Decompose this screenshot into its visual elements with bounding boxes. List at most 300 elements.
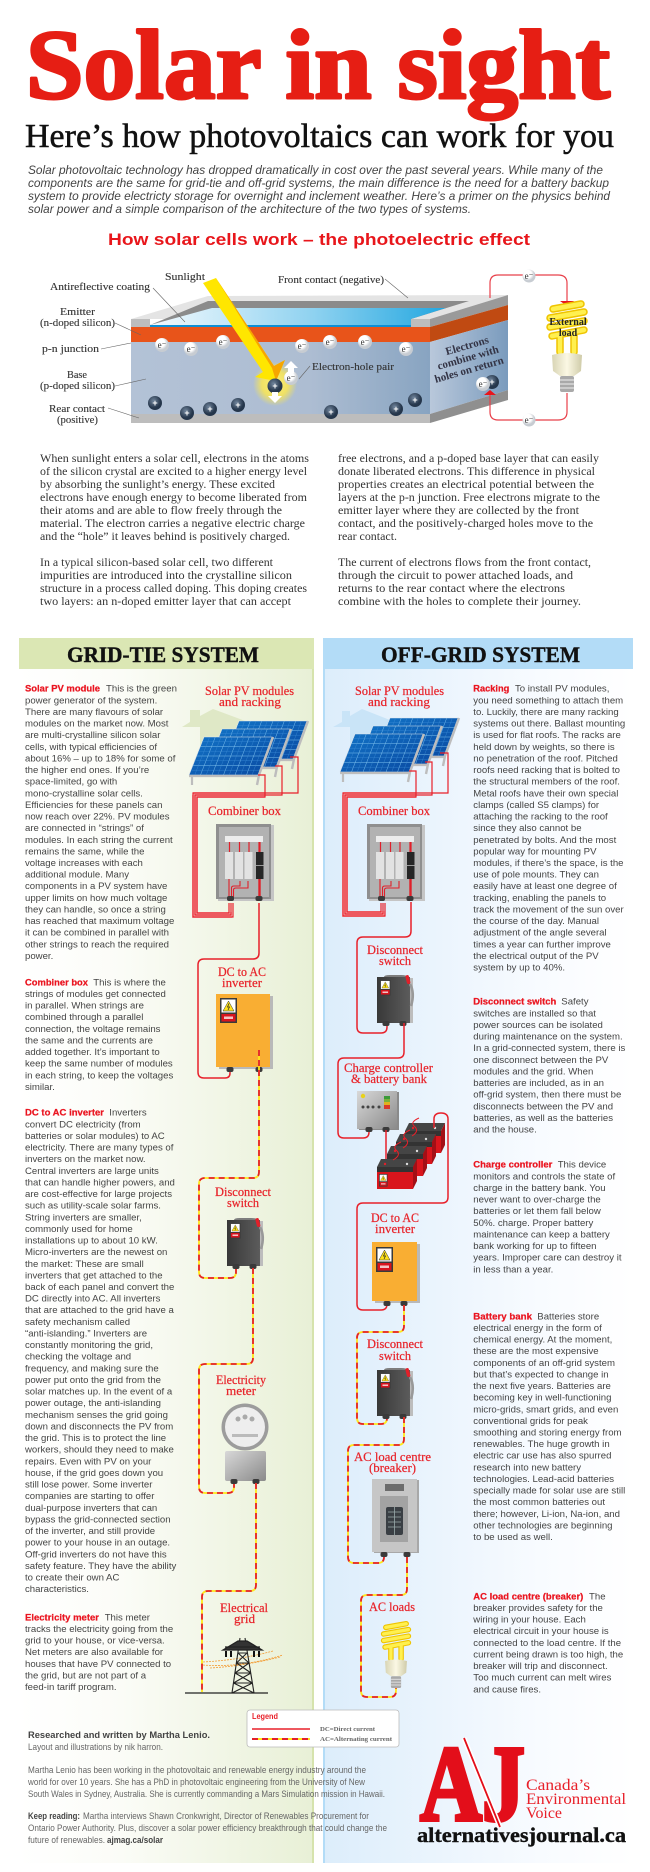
text: solar pv module: cells, with typical efficiencies of: [25, 742, 157, 753]
label: inverter: inverter: [222, 975, 263, 990]
text: battery bank: conventional grids for peak: [473, 1416, 588, 1427]
text: ac load centre: connected to the load centre. If the: [473, 1638, 621, 1649]
label: inverter: DC to AC: [371, 1210, 419, 1225]
text: ac load centre: wiring in your house. Each: [472, 1615, 586, 1626]
legend: AC=Alternating current: [320, 1736, 393, 1743]
text: solar pv module: components in a PV system have: [25, 881, 167, 892]
text: electricity meter: Net meters are also available for: [25, 1647, 164, 1658]
text: charge controller: bank working for up to fifteen: [473, 1241, 597, 1252]
icon: combiner box: [367, 824, 425, 901]
text: dc to ac inverter: back of each panel and convert the: [25, 1282, 174, 1293]
icon: charge controller: [357, 1091, 399, 1132]
text: solar pv module: other strings to reach the required: [25, 939, 169, 950]
text block: explanation left: electrons have enough energy to become liberated from: [40, 490, 307, 504]
wire: ac: [361, 1557, 407, 1697]
text: disconnect switch: In a grid-connected system, there is: [473, 1043, 625, 1054]
text: racking: the course of the day. Manual: [473, 916, 599, 927]
text block: explanation right: The current of electrons flows from the front contact,: [338, 555, 591, 569]
text: ac load centre: breaker provides safety for the: [473, 1603, 603, 1614]
text block: explanation left: material. The electron carries a negative electric charge: [40, 516, 305, 530]
label: disconnect switch: Disconnect: [367, 942, 423, 957]
text block: explanation left: structure in a process called doping. This doping creates: [40, 581, 307, 595]
label: solar pv modules and racking: [355, 683, 444, 709]
text: dc to ac inverter: down and disconnects the PV from: [25, 1421, 173, 1432]
text: dc to ac inverter: safety feature. They have the ability: [25, 1561, 176, 1572]
text: combiner box: This is where the: [93, 977, 166, 988]
diagram labels: p-n junction: [42, 344, 99, 355]
electron combining with hole: [476, 375, 499, 391]
text: battery bank: smoothing and storing energy from: [473, 1428, 622, 1438]
text: electricity meter: feed-in tariff program.: [25, 1682, 117, 1693]
text: combiner box: Combiner box: [25, 977, 89, 988]
credits: future of renewables.: [28, 1835, 105, 1846]
icon: disconnect switch: [227, 1218, 263, 1269]
text: solar pv module: remains the same, while the: [25, 846, 144, 857]
text: racking: clamps (called S5 clamps) for: [473, 800, 600, 811]
label: disconnect switch: switch: [379, 1348, 411, 1363]
text: dc to ac inverter: commonly used for home: [25, 1224, 133, 1235]
icon: solar array: [340, 718, 459, 782]
label: electrical grid: Electrical: [220, 1600, 268, 1615]
text: battery bank: chemical energy. At the moment,: [473, 1335, 612, 1346]
electrons: e⁻: [287, 373, 296, 383]
text: combiner box: connection, the voltage remains: [25, 1024, 161, 1035]
text: solar pv module: now reach over 22%. PV modules: [25, 812, 170, 823]
text: dc to ac inverter: companies are starting to offer: [25, 1491, 155, 1502]
label: inverter: [218, 964, 266, 990]
credits: [27, 1730, 387, 1846]
diagram labels: Emitter: [60, 307, 96, 318]
text: racking: Racking: [473, 684, 509, 695]
text: racking: since they also cannot be: [473, 823, 582, 834]
icon: combiner box: [216, 824, 274, 901]
text: disconnect switch: switches are installed so that: [473, 1008, 596, 1019]
holes: +: [235, 400, 241, 410]
text: charge controller: in less than a year.: [473, 1264, 553, 1275]
credits: Martha Lenio has been working in the photovoltaic and renewable energy industry around the: [28, 1765, 366, 1776]
text: dc to ac inverter: electricity. There are many types of: [25, 1143, 174, 1154]
text: racking: adjustment of the angle several: [473, 928, 607, 939]
label: electricity meter: meter: [226, 1383, 257, 1398]
label: inverter: DC to AC: [218, 964, 266, 979]
text: solar pv module: upper limits on how much voltage: [25, 893, 167, 904]
credits: Keep reading:: [28, 1811, 80, 1822]
text: dc to ac inverter: of the inverter, and still provide: [25, 1526, 155, 1537]
text: battery bank: technologies. Lead-acid batteries: [473, 1474, 614, 1485]
electrons: e⁻: [219, 337, 228, 347]
label: disconnect switch: [367, 942, 423, 968]
text: battery bank: Battery bank: [473, 1311, 533, 1322]
legend: DC=Direct current: [320, 1726, 376, 1733]
text: racking: to. Luckily, there are many racking: [473, 707, 619, 718]
heading: grid-tie: GRID-TIE SYSTEM: [67, 642, 259, 667]
electrons: e⁻: [326, 337, 335, 347]
text: racking: easily have at least one degree of: [473, 881, 617, 892]
text: solar pv module: power.: [25, 951, 53, 962]
icon: solar array: [189, 721, 308, 785]
title: Solar in sight: [26, 11, 610, 120]
holes: +: [272, 381, 278, 391]
text: dc to ac inverter: power outage, the anti-islanding: [25, 1398, 161, 1409]
text: electricity meter: the grid, but are not part of a: [25, 1670, 147, 1681]
text block: explanation right: [338, 451, 600, 608]
wires: module strings: [193, 757, 298, 917]
icon: ac load centre: [372, 1479, 419, 1557]
text: dc to ac inverter: convert DC electricity (from: [25, 1119, 141, 1130]
diagram: grid-tie system chain: [182, 683, 308, 1693]
text: disconnect switch: power sources can be isolated: [473, 1020, 603, 1031]
legend: [247, 1710, 399, 1747]
icon: electrical grid tower: [185, 1638, 283, 1693]
text: racking: Metal roofs have their own special: [473, 788, 618, 799]
wire: ac: [199, 1268, 253, 1493]
label: charge controller and battery bank: Charge controller: [344, 1060, 434, 1075]
wire: ac: [348, 1417, 404, 1563]
text: dc to ac inverter: DC directly into AC. All inverters: [25, 1294, 161, 1305]
text: combiner box: keep the same number of modules: [25, 1059, 173, 1070]
intro text: system to provide electricty storage for overnight and inclement weather. Here’s a primer on the physics behind: [28, 189, 610, 203]
credits: Researched and written by Martha Lenio.: [28, 1730, 210, 1741]
side note: [433, 334, 505, 386]
text: combiner box: in parallel. When strings are: [25, 1001, 144, 1012]
glow: [253, 362, 297, 406]
text: dc to ac inverter: checking the voltage and: [25, 1352, 131, 1363]
label: inverter: [371, 1210, 419, 1236]
text: battery bank: these are the most expensive: [473, 1346, 599, 1357]
label: electricity meter: Electricity: [216, 1372, 266, 1387]
text: disconnect switch: Safety: [561, 997, 589, 1008]
text: dc to ac inverter: such as utility-scale solar farms.: [25, 1201, 161, 1212]
icon: disconnect switch: [377, 975, 413, 1026]
logo: alternatives journal: Environmental: [526, 1791, 627, 1808]
text: dc to ac inverter: the grid. This is to protect the line: [25, 1433, 166, 1444]
label: solar pv modules and racking: [205, 683, 294, 709]
diagram labels: (n-doped silicon): [40, 318, 115, 329]
text: racking: roofs need racking that is bolted to: [473, 765, 620, 776]
wire: dc: [357, 1113, 448, 1310]
text block: explanation right: layers at the p-n junction. Free electrons migrate to the: [338, 490, 600, 504]
text: charge controller: maintenance can keep a battery: [473, 1229, 610, 1240]
text: battery bank: the next five years. Batteries are: [473, 1381, 611, 1392]
text: racking: use of pole mounts. They can: [473, 870, 599, 881]
text: electricity meter: tracks the electricity going from the: [25, 1624, 173, 1635]
text: disconnect switch: batteries, as well as the batteries: [473, 1113, 613, 1124]
text: solar pv module: are multi-crystalline silicon solar: [25, 730, 161, 741]
text: dc to ac inverter: mechanism senses the grid going: [25, 1410, 168, 1421]
text: dc to ac inverter: characteristics.: [25, 1584, 89, 1595]
label: inverter: inverter: [375, 1221, 416, 1236]
text: dc to ac inverter: dual-purpose inverters that can: [25, 1503, 157, 1514]
diagram labels: Base: [67, 370, 88, 381]
text: battery bank: electrical energy in the form of: [473, 1323, 602, 1334]
text: racking: track the movement of the sun over: [473, 904, 624, 915]
diagram labels: (positive): [57, 415, 98, 426]
text: battery bank: micro-grids, smart grids, and even: [473, 1404, 618, 1415]
text: ac load centre: electrical circuit in your house is: [473, 1626, 609, 1637]
icon: bulb external load: [549, 304, 587, 392]
text: dc to ac inverter: workers, should they need to make: [24, 1445, 174, 1456]
electrons: [155, 335, 413, 385]
text: ac load centre: The: [589, 1591, 606, 1602]
text: solar pv module: are connected in “strings” of: [25, 823, 144, 834]
text: racking: To install PV modules,: [515, 684, 609, 695]
credits: Ontario Power Authority. Plus, discover a solar power efficiency breakthrough that could change the: [28, 1823, 387, 1834]
label: combiner box: Combiner box: [358, 803, 430, 818]
label: disconnect switch: [215, 1184, 271, 1210]
text: combiner box: similar.: [25, 1082, 55, 1093]
text: dc to ac inverter: frequency, and making sure the: [25, 1363, 159, 1374]
diagram labels: Front contact (negative): [278, 275, 384, 286]
text: solar pv module: has reached that maximum voltage: [25, 916, 174, 927]
holes: +: [328, 407, 334, 417]
holes: +: [152, 398, 158, 408]
text: charge controller: batteries or let them fall below: [473, 1206, 601, 1217]
text: solar pv module: space-limited, go with: [25, 777, 117, 788]
text: dc to ac inverter: house, if the grid goes down you: [25, 1468, 163, 1479]
arrow shade: [216, 278, 285, 381]
holes: +: [393, 404, 399, 414]
label: solar pv modules and racking: Solar PV modules: [205, 683, 294, 698]
text: dc to ac inverter: bypass the grid-connected section: [25, 1514, 171, 1525]
intro text: [28, 163, 610, 216]
text: dc to ac inverter: power to your house in an outage.: [25, 1538, 170, 1549]
text: solar pv module: power generator of the system.: [25, 695, 157, 706]
text: battery bank: research into new battery: [473, 1462, 581, 1473]
text: charge controller: never want to over-charge the: [473, 1195, 601, 1206]
diagram labels: Rear contact: [49, 404, 105, 415]
text: racking: held down by weights, so there is: [473, 742, 615, 753]
subtitle: Here’s how photovoltaics can work for you: [25, 118, 614, 155]
text: dc to ac inverter: Inverters: [109, 1108, 147, 1119]
text: dc to ac inverter: solar matches up. In the event of a: [25, 1387, 173, 1398]
label: ac loads: AC loads: [369, 1599, 415, 1614]
text: battery bank: renewables. The huge growth in: [473, 1439, 610, 1450]
text block: explanation right: contact, and the positively-charged holes move to the: [338, 516, 593, 530]
icon: ac load bulb: [384, 1624, 408, 1688]
logo: alternatives journal: alternativesjournal.ca: [417, 1823, 627, 1847]
text: racking: popular way for mounting PV: [473, 846, 597, 857]
electron combining with hole: e⁻: [479, 379, 488, 389]
text: solar pv module: the higher end ones. If you’re: [25, 765, 149, 776]
wires: module strings: [343, 753, 448, 916]
label: ac load centre: [354, 1449, 431, 1475]
wire: ac: [357, 1305, 404, 1424]
icon: bulb external load: External: [549, 317, 587, 328]
text block: explanation left: and the “hole” it leaves behind is positively charged.: [40, 529, 290, 543]
text: dc to ac inverter: inverters on the market now.: [25, 1154, 146, 1165]
icon: battery bank: [377, 1118, 445, 1189]
text: racking: system by up to 40%.: [473, 963, 565, 974]
text block: explanation left: their atoms and are able to flow freely through the: [40, 503, 282, 517]
text: dc to ac inverter: batteries or solar modules) to AC: [25, 1131, 165, 1142]
label: solar pv modules and racking: Solar PV modules: [355, 683, 444, 698]
text block: explanation left: [40, 451, 309, 608]
text: battery bank: other technologies are beginning: [473, 1520, 613, 1531]
text: battery bank: becoming key in well-functioning: [473, 1393, 611, 1404]
label: charge controller and battery bank: [344, 1060, 434, 1086]
text: battery bank: electric car use has also spurred: [473, 1451, 611, 1462]
text: solar pv module: additional module. Many: [25, 870, 129, 881]
intro text: Solar photovoltaic technology has dropped dramatically in cost over the past several years. While many of the: [28, 163, 603, 177]
text: battery bank: specially made for solar use are still: [473, 1486, 625, 1497]
text block: explanation left: When sunlight enters a solar cell, electrons in the atoms: [40, 451, 309, 465]
diagram labels: (p-doped silicon): [40, 381, 115, 392]
text block: explanation right: returns to the rear contact where the electrons: [338, 581, 565, 595]
text: ac load centre: Too much current can melt wires: [473, 1673, 612, 1684]
label: disconnect switch: Disconnect: [215, 1184, 271, 1199]
text: combiner box: strings of modules get connected: [25, 989, 166, 1000]
text: dc to ac inverter: power put onto the grid from the: [25, 1375, 161, 1386]
text: disconnect switch: modules and the grid. When: [473, 1066, 593, 1077]
electron combining with hole: +: [489, 377, 495, 387]
text block: explanation left: impurities are introduced into the crystalline silicon: [40, 568, 292, 582]
text: battery bank: components of an off-grid system: [473, 1358, 615, 1369]
icon: electricity meter: [222, 1404, 268, 1484]
holes: +: [412, 395, 418, 405]
text: solar pv module: about 16% – up to 18% for some of: [25, 753, 176, 764]
electrons: e⁻: [187, 344, 196, 354]
text: solar pv module: Efficiencies for these panels can: [25, 800, 162, 811]
arrows: electron-hole movement: [268, 361, 298, 403]
text: combiner box: added together. It’s important to: [25, 1047, 160, 1058]
holes: [148, 378, 422, 420]
solar cell block: [131, 295, 508, 423]
heading: off-grid: OFF-GRID SYSTEM: [381, 642, 580, 667]
text: racking: the structural members of the roof.: [473, 777, 620, 788]
text: racking: the electrical output of the PV: [473, 951, 599, 962]
holes: +: [184, 408, 190, 418]
text: solar pv module: modules on the market now. Most: [25, 719, 169, 730]
logo: alternatives journal: AJ: [420, 1725, 525, 1844]
icon: house silhouette: [182, 709, 248, 760]
text block: explanation right: properties creates an electrical potential between the: [338, 477, 594, 491]
text: disconnect switch: Disconnect switch: [473, 997, 556, 1008]
text: battery bank: to be used as well.: [473, 1532, 553, 1543]
text: electricity meter: Electricity meter: [25, 1612, 99, 1623]
text: dc to ac inverter: DC to AC inverter: [25, 1108, 104, 1119]
leader lines: [101, 279, 408, 418]
icon: inverter: [216, 994, 273, 1072]
wire: dc: [338, 1023, 404, 1138]
wire: ac: [202, 1483, 256, 1692]
credits: Martha interviews Shawn Cronkwright, Director of Renewables Procurement for: [83, 1811, 369, 1822]
text block: explanation right: rear contact.: [338, 529, 397, 543]
text: solar pv module: voltage increases with each: [25, 858, 143, 869]
text: combiner box: the same and the currents are: [25, 1035, 153, 1046]
logo: alternatives journal: Voice: [526, 1805, 562, 1822]
text: charge controller: charge in the battery bank. You: [473, 1183, 606, 1194]
label: ac load centre: (breaker): [369, 1460, 416, 1475]
circuit wire: e⁻: [525, 271, 534, 281]
text: dc to ac inverter: repairs. Even with PV on your: [25, 1456, 152, 1467]
label: electrical grid: grid: [234, 1611, 255, 1626]
text: dc to ac inverter: String inverters are smaller,: [25, 1212, 142, 1223]
text: racking: is used for flat roofs. The racks are: [473, 730, 621, 741]
text: solar pv module: Solar PV module: [25, 684, 100, 695]
text: solar pv module: they can handle, so once a string: [25, 904, 166, 915]
wire: dc: [198, 903, 259, 1078]
arrow: sunlight: [203, 278, 285, 381]
label: charge controller and battery bank: & battery bank: [351, 1071, 427, 1086]
text: battery bank: there; however, Li-ion, Na-ion, and: [473, 1509, 620, 1520]
text: racking: systems out there. Ballast mounting: [473, 719, 625, 730]
text: battery bank: the most common batteries out: [473, 1497, 605, 1508]
credits: world for over 10 years. She has a PhD in photovoltaic engineering from the University of New: [27, 1777, 365, 1788]
text: charge controller: monitors and controls the state of: [473, 1171, 615, 1182]
side note: Electrons: [444, 334, 491, 358]
panel: off-grid system: [323, 638, 633, 1863]
text: solar pv module: mono-crystalline solar cells.: [25, 788, 143, 799]
wire: dc: [385, 1130, 387, 1170]
text: dc to ac inverter: that can handle higher powers, and: [25, 1177, 175, 1188]
label: disconnect switch: [367, 1336, 423, 1363]
icon: house silhouette: [333, 709, 395, 760]
text: racking: penetrated by bolts. And the most: [473, 835, 617, 846]
text: battery bank: Batteries store: [537, 1311, 599, 1322]
icon: inverter: [372, 1242, 420, 1306]
text: racking: tracking, enabling the panels to: [473, 893, 606, 904]
text: combiner box: in each string, to keep the voltages: [25, 1070, 173, 1081]
label: ac load centre: AC load centre: [354, 1449, 431, 1464]
label: solar pv modules and racking: and racking: [368, 694, 430, 709]
text: dc to ac inverter: installations up to about 10 kW.: [25, 1236, 158, 1247]
label: electricity meter: [216, 1372, 266, 1398]
text: dc to ac inverter: Off-grid inverters do not have this: [25, 1549, 167, 1560]
text: disconnect switch: off-grid system, then there must be: [473, 1090, 621, 1101]
text: racking: modules, if there’s the space, is the: [473, 858, 624, 869]
text: dc to ac inverter: still lose power. Some inverter: [25, 1480, 153, 1491]
heading: photoelectric effect: How solar cells work – the photoelectric effect: [108, 230, 530, 249]
text: disconnect switch: batteries are included, as in an: [473, 1078, 604, 1089]
label: solar pv modules and racking: and racking: [219, 694, 281, 709]
text: electricity meter: houses that have PV connected to: [25, 1659, 171, 1670]
text block: explanation right: combine with the holes to complete their journey.: [338, 594, 581, 608]
label: combiner box: Combiner box: [208, 803, 281, 818]
text: solar pv module: it can be combined in parallel with: [25, 928, 169, 939]
intro text: solar power and a simple comparison of the architecture of the two types of systems.: [28, 202, 471, 216]
text: racking: times a year can further improve: [473, 939, 611, 950]
intro text: components are the same for grid-tie and off-grid systems, the main difference is the need for a battery backup: [28, 176, 609, 190]
diagram labels: [40, 272, 395, 426]
text block: explanation right: through the circuit to power attached loads, and: [338, 568, 573, 582]
text: solar pv module: This is the green: [106, 684, 177, 695]
label: disconnect switch: switch: [379, 953, 411, 968]
wire: ac: [199, 1050, 259, 1278]
text: dc to ac inverter: that are attached to the grid have a: [25, 1305, 174, 1316]
side note: combine with: [436, 344, 500, 373]
text: dc to ac inverter: to create their own AC: [25, 1572, 119, 1583]
text: racking: no penetration of the roof. Pitched: [473, 753, 618, 764]
legend: Legend: [252, 1712, 278, 1721]
text: disconnect switch: and the house.: [473, 1125, 537, 1136]
diagram labels: Antireflective coating: [50, 282, 150, 293]
text: electricity meter: This meter: [105, 1612, 151, 1623]
text: dc to ac inverter: inverters that get attached to the: [25, 1270, 163, 1281]
text: charge controller: years. Improper care can destroy it: [473, 1253, 622, 1264]
text: ac load centre: breaker will trip and disconnect.: [473, 1661, 608, 1672]
label: disconnect switch: switch: [227, 1195, 259, 1210]
electrons: e⁻: [402, 344, 411, 354]
text: dc to ac inverter: the market: These are small: [25, 1259, 144, 1270]
text: battery bank: but that’s expected to change in: [473, 1369, 609, 1380]
chart: solar cell diagram: [40, 270, 587, 426]
text: disconnect switch: during maintenance on the system.: [473, 1032, 623, 1043]
text: racking: attaching the racking to the roof: [473, 812, 608, 823]
electrons: e⁻: [158, 340, 167, 350]
text block: explanation right: emitter layer where they are collected by the front: [338, 503, 580, 517]
diagram: off-grid system chain: [333, 683, 459, 1697]
diagram labels: Sunlight: [165, 272, 205, 283]
